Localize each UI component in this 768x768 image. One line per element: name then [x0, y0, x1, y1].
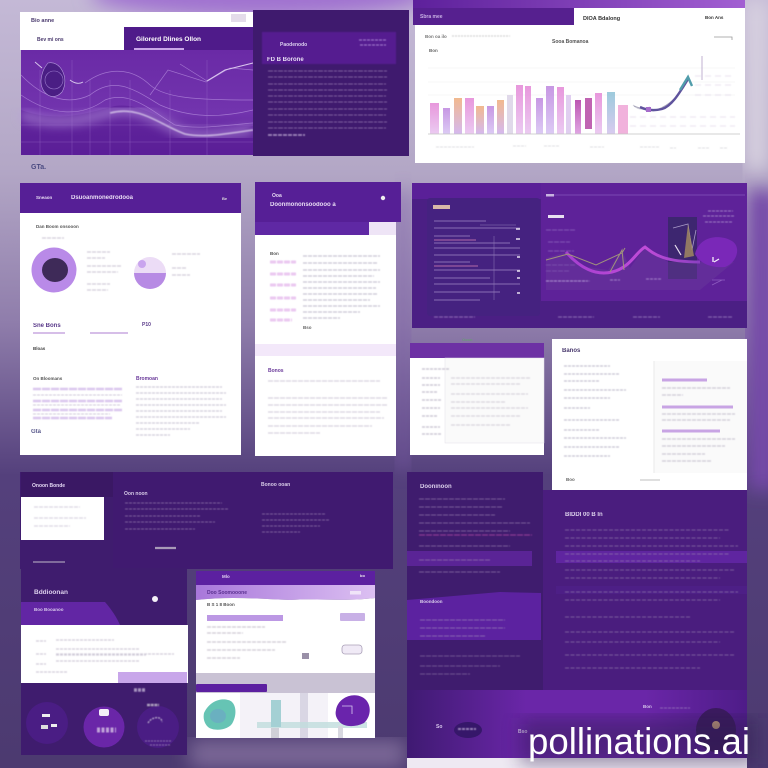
heading: column: Dooninoon [420, 484, 452, 490]
panel: bottom-left dark summary: Oon noon [124, 491, 148, 497]
panel: middle-left report: Bloas [33, 346, 46, 351]
panel: top-right bar chart: DIOA Bdalong [583, 16, 620, 22]
heading: bar chart: Sbra mee [420, 14, 443, 20]
panel: middle article: Bso [303, 325, 312, 330]
panel: small white report: Ooon [462, 337, 473, 342]
icon: circle 2 [84, 706, 124, 748]
panel: middle-left report: P10 [142, 322, 151, 328]
panel: bottom centre illustration [196, 673, 375, 738]
panel: bottom-left circles card [21, 568, 188, 755]
heading: article: Ooa [272, 193, 282, 199]
panel: middle-left report: Dan Boom onsooon [36, 224, 79, 229]
panel: top-right bar chart: Sooa Bomanoa [552, 39, 589, 45]
watermark: pollinations.ai [528, 721, 750, 762]
icon: band badge right [696, 708, 736, 752]
panel: middle-left report: Dsuoanmonedrodooa [71, 195, 134, 201]
panel: top-right bar chart [413, 0, 745, 163]
panel: bottom-left circles card: Boo Booanoo [34, 607, 64, 612]
chart: teal bar [257, 700, 367, 738]
panel: white document [552, 339, 747, 491]
panel: top-left article: Paodenodo [280, 42, 307, 48]
panel: white document: Boo [566, 477, 575, 482]
panel: bottom-right left column: Boondoon [420, 599, 443, 604]
chart: half circle [134, 257, 166, 289]
heading: report: Sneaon [36, 195, 53, 200]
panel: bottom band: Bso [518, 729, 527, 735]
panel: middle article: Bon [270, 251, 279, 256]
text columns: On Bloomans [33, 376, 63, 381]
panel: bottom-right article [543, 490, 747, 690]
text columns: Bromoan [136, 376, 158, 382]
list [433, 205, 732, 317]
label: footer: GTa. [31, 164, 46, 171]
panel: middle-left report: Be [222, 196, 228, 201]
icon: circle 1 [26, 702, 68, 744]
panel: top-left wave chart [20, 12, 254, 171]
heading: top-left: Bio anne [31, 18, 54, 24]
icon: teal flower [204, 699, 235, 730]
panel: top-left wave chart: Bev mi ons [37, 37, 64, 43]
heading: circles card: Bddioonan [34, 589, 68, 596]
heading: summary: Onoon Bonde [32, 483, 65, 489]
panel: small white report [410, 337, 544, 455]
panel: bottom-left dark summary: Bonoo ooan [261, 482, 290, 488]
stat labels: Sne Bons [33, 323, 61, 329]
panel: bottom band: So [436, 724, 442, 730]
bar chart [428, 56, 740, 134]
panel: top-right bar chart: Bon Ans [705, 15, 724, 20]
panel: middle article: Doonmononsoodooo a [270, 202, 336, 208]
heading: article: BIDDI 00 B In [565, 512, 603, 518]
heading: document: Banos [562, 348, 581, 354]
subheading: article lower: Bonos [268, 368, 284, 374]
panel: middle article [255, 182, 401, 456]
panel: top-right bar chart: Bon [429, 48, 438, 53]
panel: top-left article [253, 10, 409, 156]
panel: bottom-right left column [407, 472, 543, 690]
panel: top-left article: FD B Borone [267, 57, 304, 63]
chart: donut [32, 248, 76, 292]
panel: middle-left report [20, 183, 241, 455]
panel: top-right bar chart: Bon oa ilo [425, 34, 447, 39]
panel: bottom centre form card: B S 1 8 Boon [207, 602, 235, 607]
heading: form card: Doo Soomooone [207, 590, 247, 596]
wave chart [546, 211, 737, 290]
icon: circle 3 [137, 705, 179, 748]
icon: purple blob [336, 695, 370, 726]
panel: bottom band [407, 690, 747, 768]
panel: bottom centre form card [196, 571, 375, 673]
panel: bottom centre form card: bo [360, 573, 365, 578]
panel: bottom band: Bon [643, 704, 652, 709]
panel: middle-right dark dashboard [412, 183, 747, 328]
panel: top-left wave chart: Gilorerd Dlines Ollon [136, 36, 201, 43]
wave chart [20, 50, 254, 155]
panel: bottom centre form card: Mlo [222, 574, 230, 579]
text columns: Gta [31, 429, 42, 435]
text columns [31, 376, 226, 435]
icon: band badge left [454, 722, 482, 738]
panel: bottom-left dark summary [20, 472, 393, 569]
